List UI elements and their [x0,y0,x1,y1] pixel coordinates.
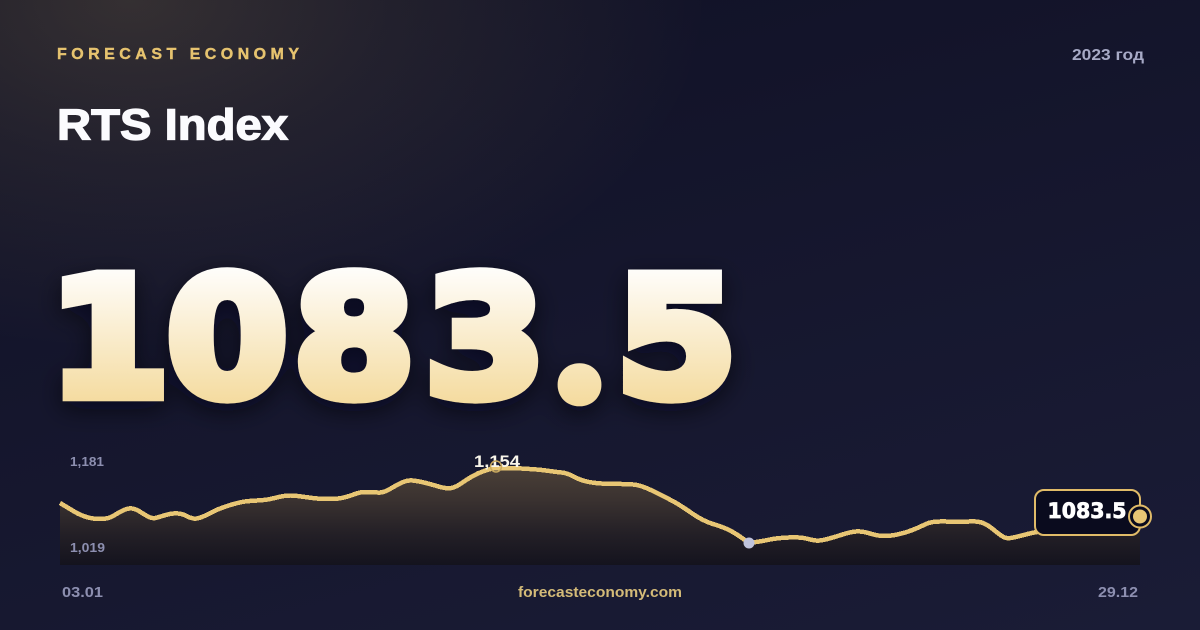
year label: 2023 год [1072,47,1144,64]
y axis min label: 1,019 [70,540,105,555]
chart line [60,468,1045,543]
callout box [1035,490,1140,535]
title: RTS Index [57,100,289,150]
peak marker [490,461,502,472]
brand label: FORECAST ECONOMY [57,46,299,63]
low marker [744,538,754,548]
peak marker label: 1,154 [474,452,521,471]
callout value: 1083.5 [1048,499,1126,524]
area chart [60,468,1140,565]
start date: 03.01 [62,584,103,601]
y axis max label: 1,181 [70,454,104,469]
chart area fill [60,468,1140,565]
current value callout [1035,490,1151,535]
current point marker [1129,506,1151,528]
big value: . [543,177,616,460]
big value: 5 [616,243,737,435]
big value: 1083 [48,243,546,435]
end date: 29.12 [1098,584,1138,601]
website: forecasteconomy.com [518,584,682,601]
